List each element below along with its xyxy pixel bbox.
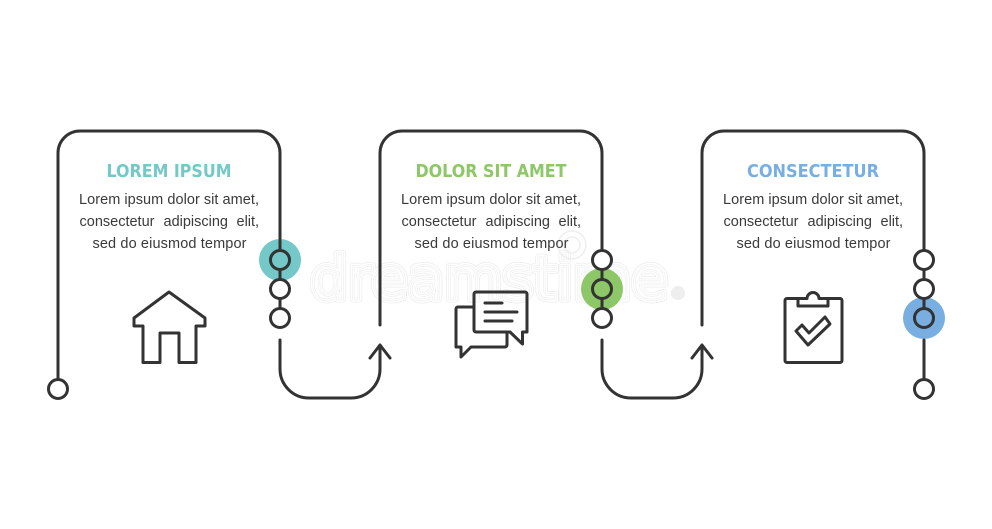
body text: consectetur <box>724 214 799 230</box>
watermark: dreamstime <box>310 244 668 314</box>
body text: elit, <box>880 214 903 230</box>
arrow: second to third <box>602 340 712 398</box>
connector line: second panel outline <box>380 131 602 325</box>
body text: Lorem ipsum dolor sit amet, <box>401 192 581 208</box>
accent circle: teal <box>259 239 301 281</box>
nodes: first panel <box>270 240 290 328</box>
arrow: first to second <box>280 340 390 398</box>
body text: consectetur <box>80 214 155 230</box>
heading: LOREM IPSUM <box>106 162 232 182</box>
body text <box>401 192 581 252</box>
heading: DOLOR SIT AMET <box>416 162 567 182</box>
body text: elit, <box>236 214 259 230</box>
watermark: dreamstime <box>310 244 668 314</box>
nodes: third panel <box>914 240 934 328</box>
icon: chat bubbles <box>456 292 527 357</box>
body text: consectetur <box>402 214 477 230</box>
body text: adipiscing <box>486 214 550 230</box>
start node <box>48 380 68 398</box>
body text: sed do eiusmod tempor <box>736 236 891 252</box>
body text: Lorem ipsum dolor sit amet, <box>723 192 903 208</box>
body text: sed do eiusmod tempor <box>414 236 569 252</box>
watermark: dreamstime <box>310 244 668 314</box>
body text: elit, <box>558 214 581 230</box>
body text: adipiscing <box>164 214 228 230</box>
icon: clipboard with check mark <box>785 292 842 362</box>
connector line: first panel outline <box>58 131 280 380</box>
body text <box>79 192 259 252</box>
panel: lorem ipsum text <box>79 162 259 252</box>
body text <box>723 192 903 252</box>
connector line: third panel outline <box>702 131 924 325</box>
end node <box>914 380 934 398</box>
connector line: end segment <box>922 340 926 380</box>
panel: consectetur text <box>723 162 903 252</box>
nodes: second panel <box>592 240 612 328</box>
accent circle: green <box>581 268 623 310</box>
accent circle: blue <box>903 297 945 339</box>
body text: sed do eiusmod tempor <box>92 236 247 252</box>
heading: CONSECTETUR <box>747 162 879 182</box>
panel: dolor sit amet text <box>401 162 581 252</box>
body text: adipiscing <box>808 214 872 230</box>
watermark: dreamstime <box>310 244 668 314</box>
body text: Lorem ipsum dolor sit amet, <box>79 192 259 208</box>
icon: house <box>134 292 205 362</box>
